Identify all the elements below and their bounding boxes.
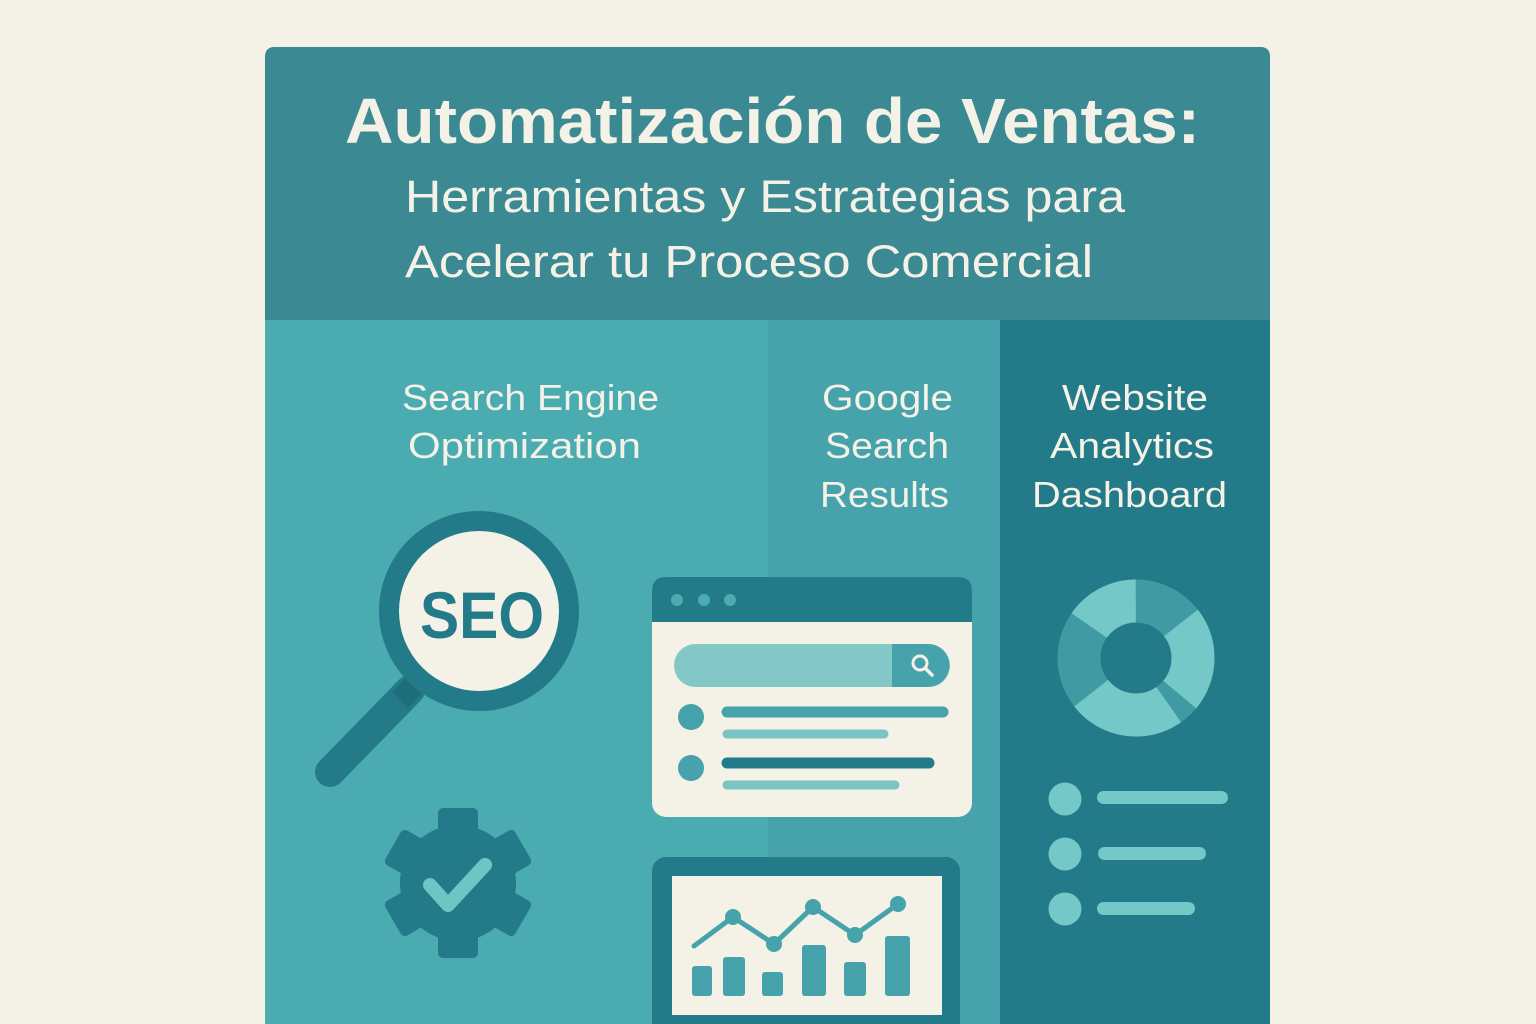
browser: search results (652, 577, 972, 817)
title: Automatización de Ventas: (345, 85, 1200, 157)
icon: gear with check (383, 808, 533, 958)
subtitle: Acelerar tu Proceso Comercial (405, 236, 1093, 287)
heading: Google Search Results: Results (820, 474, 949, 515)
heading: Google Search Results: Google (822, 377, 953, 418)
heading: Website Analytics Dashboard: Dashboard (1032, 474, 1227, 515)
heading: Website Analytics Dashboard: Website (1062, 377, 1208, 418)
icon: SEO magnifier (330, 511, 579, 772)
heading: Website Analytics Dashboard: Analytics (1050, 425, 1214, 466)
legend list (1048, 782, 1228, 926)
icon: SEO magnifier: SEO (420, 578, 544, 652)
heading: Search Engine Optimization: Search Engine (402, 377, 659, 418)
panel: header (265, 47, 1270, 320)
heading: Google Search Results: Search (825, 425, 949, 466)
chart: analytics monitor (652, 857, 960, 1024)
chart: donut (1079, 601, 1193, 715)
subtitle: Herramientas y Estrategias para (405, 171, 1126, 222)
heading: Search Engine Optimization: Optimization (408, 425, 641, 466)
panel: main card (265, 47, 1270, 1024)
search bar (674, 644, 950, 687)
